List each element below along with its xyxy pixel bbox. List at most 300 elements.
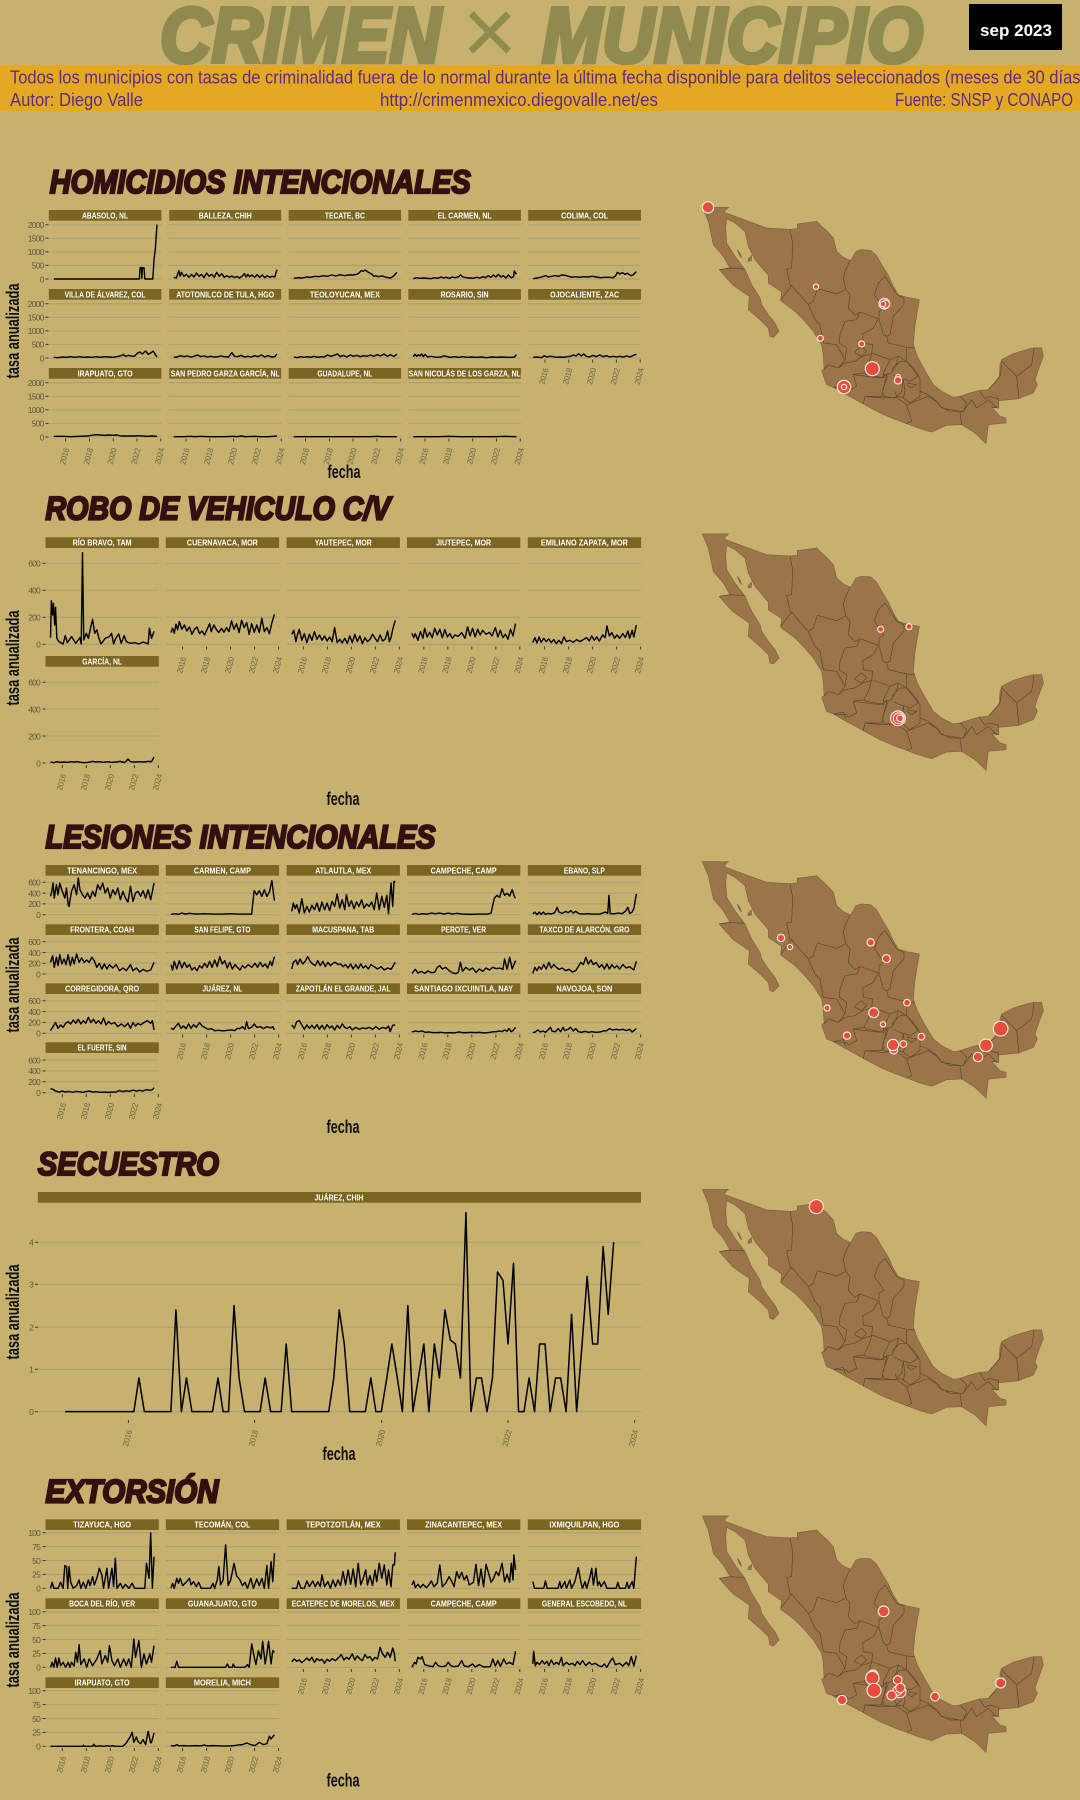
- x axis: homicidios: [58, 360, 646, 466]
- y axis: homicidios: 500: [32, 261, 45, 271]
- x axis: extorsion: 2022: [489, 1676, 502, 1696]
- panel: Corregidora: [46, 983, 159, 1031]
- x axis: robo: 2022: [609, 655, 622, 675]
- y axis: homicidios: 1000: [28, 326, 45, 336]
- y axis: extorsion: 25: [32, 1570, 41, 1580]
- x axis: extorsion: 2020: [465, 1676, 478, 1696]
- heading: lesiones: LESIONES INTENCIONALES: [46, 819, 436, 855]
- section: homicidios intencionales: [3, 164, 646, 482]
- x axis: homicidios: 2018: [322, 446, 335, 466]
- panel: Irapuato: IRAPUATO, GTO: [78, 368, 133, 378]
- axis label: fecha: fecha: [328, 462, 361, 482]
- x axis: homicidios: 2022: [369, 446, 383, 466]
- y axis: secuestro: 1: [29, 1365, 34, 1375]
- y axis: lesiones: 600: [28, 1055, 41, 1065]
- panel: Guanajuato: [166, 1598, 279, 1667]
- x axis: lesiones: 2024: [392, 1041, 405, 1061]
- panel: Rio Bravo: [46, 537, 159, 644]
- x axis: homicidios: 2024: [513, 446, 526, 466]
- x axis: extorsion: 2018: [79, 1755, 92, 1774]
- y axis: extorsion: 75: [32, 1542, 41, 1552]
- panel: Ecatepec de Morelos: [287, 1598, 400, 1663]
- x axis: extorsion: 2024: [633, 1676, 646, 1696]
- panel: San Felipe: SAN FELIPE, GTO: [194, 925, 251, 935]
- x axis: secuestro: 2022: [501, 1428, 514, 1448]
- y axis: robo: 200: [28, 731, 41, 741]
- x axis: extorsion: 2024: [392, 1676, 405, 1696]
- panel: San Pedro Garza Garcia: SAN PEDRO GARZA GARCÍA, NL: [171, 367, 280, 378]
- y axis: homicidios: 2000: [28, 220, 45, 230]
- x axis: robo: 2022: [247, 655, 260, 675]
- x axis: extorsion: 2020: [585, 1676, 598, 1696]
- x axis: extorsion: 2024: [151, 1755, 164, 1774]
- x axis: lesiones: 2024: [271, 1041, 284, 1061]
- panel: Villa de Alvarez: VILLA DE ÁLVAREZ, COL: [65, 288, 146, 299]
- x axis: extorsion: 2022: [609, 1676, 622, 1696]
- panel: Abasolo: ABASOLO, NL: [82, 210, 128, 220]
- x axis: secuestro: 2024: [627, 1428, 640, 1448]
- x axis: extorsion: 2024: [271, 1755, 284, 1774]
- panel: Perote: PEROTE, VER: [441, 925, 486, 935]
- panel: Tecoman: [166, 1519, 279, 1588]
- x axis: extorsion: 2018: [561, 1676, 574, 1696]
- panel: Villa de Alvarez: [49, 288, 161, 358]
- y axis: robo: 0: [36, 758, 41, 768]
- panel: Tepotzotlan: TEPOTZOTLÁN, MEX: [306, 1519, 381, 1530]
- panel: Macuspana: [287, 924, 400, 970]
- panel: Guadalupe: GUADALUPE, NL: [317, 368, 372, 378]
- x axis: extorsion: 2016: [417, 1676, 430, 1696]
- panel: Jiutepec: JIUTEPEC, MOR: [436, 538, 491, 548]
- x axis: homicidios: 2018: [561, 366, 574, 386]
- panel: San Nicolas de los Garza: [408, 367, 521, 437]
- x axis: robo: 2018: [320, 655, 333, 675]
- x axis: extorsion: 2018: [320, 1676, 333, 1696]
- axis label: tasa anualizada: tasa anualizada: [3, 1264, 23, 1360]
- y axis: lesiones: 200: [28, 958, 41, 968]
- panel: Juarez Chih: JUÁREZ, CHIH: [314, 1191, 364, 1202]
- x axis: extorsion: [55, 1669, 646, 1774]
- x axis: homicidios: 2024: [153, 446, 166, 466]
- y axis: lesiones: [28, 878, 46, 1098]
- x axis: lesiones: 2020: [344, 1041, 357, 1061]
- panel: Rosario: ROSARIO, SIN: [441, 289, 489, 299]
- x axis: homicidios: 2016: [298, 446, 311, 466]
- panel: Taxco de Alarcon: TAXCO DE ALARCÓN, GRO: [539, 924, 630, 935]
- y axis: robo: 400: [28, 586, 41, 596]
- panel: Morelia: MORELIA, MICH: [194, 1678, 251, 1688]
- x axis: lesiones: 2018: [199, 1041, 212, 1061]
- panel: Tenancingo: [46, 865, 159, 906]
- x axis: lesiones: 2020: [103, 1101, 116, 1121]
- y axis: extorsion: 0: [36, 1663, 41, 1673]
- y axis: extorsion: 100: [28, 1686, 41, 1696]
- panel: Teoloyucan: TEOLOYUCAN, MEX: [310, 289, 380, 299]
- x axis: lesiones: [55, 1034, 646, 1121]
- y axis: homicidios: 500: [32, 419, 45, 429]
- panel: Atlautla: [287, 865, 400, 914]
- x axis: robo: 2018: [561, 655, 574, 675]
- panel: Abasolo: [49, 210, 161, 279]
- x axis: robo: 2020: [103, 772, 116, 792]
- panel: Tecate: [289, 210, 401, 278]
- y axis: homicidios: [28, 220, 48, 442]
- x axis: secuestro: 2018: [247, 1428, 260, 1448]
- y axis: lesiones: 0: [36, 969, 41, 979]
- panel: Navojoa: [528, 983, 641, 1033]
- panel: Emiliano Zapata: EMILIANO ZAPATA, MOR: [541, 538, 628, 548]
- y axis: homicidios: 1000: [28, 247, 45, 257]
- y axis: extorsion: 75: [32, 1621, 41, 1631]
- panel: Ojocaliente: [528, 289, 641, 358]
- panel: Santiago Ixcuintla: [407, 983, 520, 1033]
- x axis: homicidios: 2016: [58, 446, 71, 466]
- y axis: lesiones: 400: [28, 1066, 41, 1076]
- panel: Rosario: [408, 289, 521, 358]
- panel: Ixmiquilpan: IXMIQUILPAN, HGO: [549, 1520, 620, 1530]
- x axis: lesiones: 2016: [417, 1041, 430, 1061]
- panel: Tecoman: TECOMÁN, COL: [194, 1519, 250, 1530]
- x axis: lesiones: 2016: [175, 1041, 188, 1061]
- x axis: homicidios: 2020: [465, 446, 478, 466]
- panel: Irapuato: [49, 368, 161, 437]
- panel: El Carmen: [408, 210, 521, 279]
- x axis: homicidios: 2018: [82, 446, 95, 466]
- x axis: robo: 2024: [633, 655, 646, 675]
- x axis: robo: 2016: [175, 655, 188, 675]
- panel: Campeche: CAMPECHE, CAMP: [431, 865, 497, 875]
- y axis: robo: 0: [36, 640, 41, 650]
- y axis: secuestro: [29, 1238, 38, 1417]
- y axis: homicidios: 2000: [28, 378, 45, 388]
- panel: San Felipe: [166, 924, 279, 971]
- y axis: lesiones: 400: [28, 888, 41, 898]
- panel: Juarez NL: [166, 983, 279, 1031]
- x axis: robo: 2016: [296, 655, 309, 675]
- axis label: fecha: fecha: [322, 1444, 356, 1464]
- x axis: extorsion: 2022: [368, 1676, 381, 1696]
- y axis: homicidios: 500: [32, 340, 45, 350]
- panel: Morelia: [166, 1677, 279, 1746]
- y axis: robo: 600: [28, 678, 41, 688]
- axis label: fecha: fecha: [326, 1771, 360, 1791]
- x axis: homicidios: 2020: [106, 446, 119, 466]
- x axis: lesiones: 2018: [320, 1041, 333, 1061]
- panel: Yautepec: YAUTEPEC, MOR: [315, 538, 372, 548]
- y axis: secuestro: 4: [29, 1238, 34, 1248]
- x axis: lesiones: 2018: [79, 1101, 92, 1121]
- x axis: homicidios: 2016: [178, 446, 192, 466]
- x axis: robo: [55, 646, 646, 792]
- x axis: extorsion: 2020: [344, 1676, 357, 1696]
- x axis: homicidios: 2022: [250, 446, 263, 466]
- x axis: robo: 2018: [441, 655, 454, 675]
- x axis: extorsion: 2022: [127, 1755, 140, 1774]
- panel: Guanajuato: GUANAJUATO, GTO: [188, 1599, 257, 1609]
- x axis: robo: 2018: [79, 772, 92, 792]
- y axis: extorsion: 25: [32, 1728, 41, 1738]
- x axis: robo: 2016: [55, 772, 68, 792]
- panel: Balleza: [169, 210, 281, 278]
- y axis: homicidios: 0: [40, 432, 45, 442]
- panel: Guadalupe: [289, 368, 401, 437]
- panel: Navojoa: NAVOJOA, SON: [556, 984, 612, 994]
- x axis: robo: 2022: [368, 655, 381, 675]
- panel: El Fuerte: [46, 1042, 159, 1092]
- section: extorsion: [3, 1474, 646, 1791]
- panel: Irapuato extorsion: [46, 1677, 159, 1746]
- x axis: lesiones: 2020: [223, 1041, 236, 1061]
- x axis: homicidios: 2016: [537, 366, 551, 386]
- panel: Macuspana: MACUSPANA, TAB: [312, 925, 374, 935]
- panel: Tepotzotlan: [287, 1519, 400, 1588]
- y axis: lesiones: 0: [36, 1088, 41, 1098]
- subtitle band: [0, 65, 1080, 111]
- panel: Ebano: [528, 865, 641, 915]
- x axis: lesiones: 2022: [609, 1041, 622, 1061]
- x axis: robo: 2024: [392, 655, 405, 675]
- x axis: lesiones: 2018: [441, 1041, 454, 1061]
- y axis: extorsion: 0: [36, 1584, 41, 1594]
- y axis: secuestro: 3: [29, 1280, 34, 1290]
- x axis: homicidios: 2020: [346, 446, 359, 466]
- axis label: fecha: fecha: [326, 789, 360, 809]
- y axis: lesiones: 400: [28, 1007, 41, 1017]
- y axis: extorsion: 25: [32, 1649, 41, 1659]
- x axis: lesiones: 2022: [247, 1041, 260, 1061]
- y axis: extorsion: 100: [28, 1607, 41, 1617]
- x axis: lesiones: 2016: [55, 1101, 68, 1121]
- y axis: lesiones: 600: [28, 878, 41, 888]
- panel: Ojocaliente: OJOCALIENTE, ZAC: [550, 289, 619, 299]
- section: robo de vehiculo: [3, 490, 646, 809]
- y axis: lesiones: 200: [28, 899, 41, 909]
- panel: Colima: COLIMA, COL: [561, 210, 608, 220]
- y axis: homicidios: 1500: [28, 234, 45, 244]
- panel: Frontera: [46, 924, 159, 972]
- x axis: extorsion: 2016: [175, 1755, 188, 1774]
- heading: secuestro: SECUESTRO: [38, 1146, 219, 1182]
- panel: Teoloyucan: [289, 289, 401, 358]
- x axis: extorsion: 2022: [247, 1755, 260, 1774]
- y axis: extorsion: 0: [36, 1742, 41, 1752]
- x axis: extorsion: 2016: [55, 1755, 68, 1774]
- y axis: extorsion: 100: [28, 1528, 41, 1538]
- panel: Colima: [528, 210, 641, 279]
- panel: Carmen: CARMEN, CAMP: [194, 865, 251, 875]
- heading: extorsion: EXTORSIÓN: [46, 1474, 219, 1510]
- panel: Emiliano Zapata: [528, 537, 641, 644]
- panel: Ixmiquilpan: [528, 1519, 641, 1588]
- y axis: robo: 400: [28, 704, 41, 714]
- y axis: extorsion: 50: [32, 1635, 41, 1645]
- panel: Garcia: [46, 655, 159, 763]
- panel: Taxco de Alarcon: [528, 924, 641, 973]
- panel: El Carmen: EL CARMEN, NL: [438, 210, 492, 220]
- panel: Jiutepec: [407, 537, 520, 640]
- panel: Carmen: [166, 865, 279, 914]
- y axis: homicidios: 0: [40, 274, 45, 284]
- x axis: extorsion: 2020: [223, 1755, 236, 1774]
- y axis: secuestro: 0: [29, 1407, 34, 1417]
- x axis: robo: 2018: [199, 655, 212, 675]
- date badge: sep 2023: [980, 21, 1052, 40]
- x axis: lesiones: 2022: [127, 1101, 140, 1121]
- y axis: homicidios: 1500: [28, 392, 45, 402]
- x axis: robo: 2016: [417, 655, 430, 675]
- panel: Zinacantepec: ZINACANTEPEC, MEX: [425, 1520, 502, 1530]
- x axis: robo: 2024: [151, 772, 164, 792]
- y axis: homicidios: 1000: [28, 405, 45, 415]
- x axis: homicidios: 2024: [633, 366, 646, 386]
- panel: Ebano: EBANO, SLP: [564, 865, 605, 875]
- y axis: lesiones: 600: [28, 996, 41, 1006]
- axis label: tasa anualizada: tasa anualizada: [3, 937, 23, 1032]
- panel: Juarez Chih: [38, 1191, 641, 1412]
- x axis: lesiones: 2022: [489, 1041, 502, 1061]
- subtitle band: Autor: Diego Valle: [10, 90, 143, 110]
- section: lesiones intencionales: [3, 819, 646, 1137]
- panel: Atotonilco de Tula: ATOTONILCO DE TULA, HGO: [176, 289, 275, 299]
- x axis: secuestro: [121, 1420, 640, 1448]
- x axis: robo: 2024: [513, 655, 526, 675]
- x axis: homicidios: 2018: [441, 446, 455, 466]
- map: secuestro: [702, 1189, 1043, 1426]
- x axis: homicidios: 2016: [418, 446, 431, 466]
- x axis: homicidios: 2018: [202, 446, 215, 466]
- x axis: robo: 2022: [127, 772, 140, 792]
- x axis: secuestro: 2016: [121, 1428, 134, 1448]
- x axis: extorsion: 2016: [296, 1676, 309, 1696]
- panel: Boca del Rio: [46, 1598, 159, 1667]
- x axis: lesiones: 2020: [585, 1041, 598, 1061]
- y axis: secuestro: 2: [29, 1323, 34, 1333]
- x axis: lesiones: 2020: [465, 1041, 478, 1061]
- panel: Tenancingo: TENANCINGO, MEX: [67, 865, 137, 875]
- y axis: robo: [28, 559, 46, 768]
- subtitle band: http://crimenmexico.diegovalle.net/es: [380, 90, 658, 110]
- panel: Tizayuca: [46, 1519, 159, 1588]
- panel: Garcia: GARCÍA, NL: [82, 655, 122, 666]
- x axis: extorsion: 2024: [513, 1676, 526, 1696]
- panel: Boca del Rio: BOCA DEL RÍO, VER: [69, 1598, 135, 1609]
- panel: Tizayuca: TIZAYUCA, HGO: [73, 1520, 132, 1530]
- title: [160, 0, 923, 85]
- date badge: [969, 4, 1062, 50]
- panel: Corregidora: CORREGIDORA, QRO: [65, 984, 140, 994]
- panel: Yautepec: [287, 537, 400, 644]
- y axis: homicidios: 2000: [28, 299, 45, 309]
- map: lesiones: [702, 862, 1043, 1098]
- panel: Balleza: BALLEZA, CHIH: [199, 210, 252, 220]
- panel: Cuernavaca: CUERNAVACA, MOR: [187, 538, 258, 548]
- panel: Atlautla: ATLAUTLA, MEX: [315, 865, 372, 875]
- x axis: lesiones: 2022: [368, 1041, 381, 1061]
- x axis: robo: 2022: [489, 655, 502, 675]
- y axis: extorsion: 50: [32, 1714, 41, 1724]
- panel: Ecatepec de Morelos: ECATEPEC DE MORELOS, MEX: [292, 1599, 395, 1609]
- axis label: fecha: fecha: [326, 1117, 360, 1137]
- panel: Zinacantepec: [407, 1519, 520, 1588]
- panel: Campeche: [407, 865, 520, 914]
- panel: El Fuerte: EL FUERTE, SIN: [78, 1043, 127, 1053]
- x axis: lesiones: 2024: [513, 1041, 526, 1061]
- y axis: robo: 600: [28, 559, 41, 569]
- x axis: extorsion: 2018: [441, 1676, 454, 1696]
- panel: Campeche extorsion: [407, 1598, 520, 1667]
- x axis: robo: 2016: [537, 655, 550, 675]
- y axis: lesiones: 200: [28, 1077, 41, 1087]
- x axis: lesiones: 2016: [537, 1041, 550, 1061]
- map: extorsion: [702, 1516, 1043, 1752]
- axis label: tasa anualizada: tasa anualizada: [3, 283, 23, 378]
- axis label: tasa anualizada: tasa anualizada: [3, 1592, 23, 1688]
- x axis: robo: 2020: [585, 655, 598, 675]
- panel: San Pedro Garza Garcia: [169, 367, 281, 437]
- x axis: homicidios: 2022: [609, 366, 622, 386]
- y axis: extorsion: 75: [32, 1700, 41, 1710]
- y axis: extorsion: 50: [32, 1556, 41, 1566]
- x axis: lesiones: 2024: [633, 1041, 646, 1061]
- panel: Juarez NL: JUÁREZ, NL: [202, 983, 242, 994]
- y axis: robo: 200: [28, 613, 41, 623]
- x axis: robo: 2020: [465, 655, 478, 675]
- x axis: secuestro: 2020: [374, 1428, 387, 1448]
- map: robo de vehiculo: [702, 534, 1043, 770]
- section: secuestro: [3, 1146, 641, 1464]
- heading: homicidios: HOMICIDIOS INTENCIONALES: [50, 164, 471, 200]
- panel: Santiago Ixcuintla: SANTIAGO IXCUINTLA, NAY: [414, 984, 513, 994]
- panel: General Escobedo: [528, 1598, 641, 1667]
- y axis: lesiones: 0: [36, 910, 41, 920]
- panel: Rio Bravo: RÍO BRAVO, TAM: [73, 537, 132, 548]
- panel: General Escobedo: GENERAL ESCOBEDO, NL: [542, 1599, 627, 1609]
- panel: Tecate: TECATE, BC: [325, 210, 365, 220]
- panel: Perote: [407, 924, 520, 974]
- y axis: lesiones: 200: [28, 1018, 41, 1028]
- axis label: tasa anualizada: tasa anualizada: [3, 610, 23, 706]
- panel: Zapotlan el Grande: ZAPOTLÁN EL GRANDE, JAL: [296, 983, 391, 994]
- x axis: lesiones: 2018: [561, 1041, 574, 1061]
- y axis: lesiones: 600: [28, 937, 41, 947]
- panel: Irapuato extorsion: IRAPUATO, GTO: [75, 1678, 130, 1688]
- x axis: homicidios: 2024: [393, 446, 406, 466]
- x axis: lesiones: 2024: [151, 1101, 164, 1121]
- panel: Cuernavaca: [166, 537, 279, 635]
- x axis: robo: 2020: [344, 655, 357, 675]
- y axis: homicidios: 1500: [28, 313, 45, 323]
- x axis: homicidios: 2020: [226, 446, 239, 466]
- panel: Atotonilco de Tula: [169, 289, 281, 357]
- x axis: robo: 2024: [271, 655, 284, 675]
- panel: Campeche extorsion: CAMPECHE, CAMP: [431, 1599, 497, 1609]
- y axis: lesiones: 400: [28, 948, 41, 958]
- panel: Frontera: FRONTERA, COAH: [70, 925, 134, 935]
- y axis: lesiones: 0: [36, 1029, 41, 1039]
- panel: San Nicolas de los Garza: SAN NICOLÁS DE LOS GARZA, NL: [409, 367, 521, 378]
- x axis: homicidios: 2020: [585, 366, 598, 386]
- x axis: extorsion: 2020: [103, 1755, 116, 1774]
- x axis: extorsion: 2018: [199, 1755, 212, 1774]
- x axis: homicidios: 2024: [274, 446, 287, 466]
- x axis: robo: 2020: [223, 655, 236, 675]
- panel: Zapotlan el Grande: [287, 983, 400, 1032]
- map: homicidios: [702, 202, 1043, 444]
- x axis: extorsion: 2016: [537, 1676, 550, 1696]
- x axis: homicidios: 2022: [129, 446, 143, 466]
- y axis: homicidios: 0: [40, 353, 45, 363]
- x axis: homicidios: 2022: [489, 446, 502, 466]
